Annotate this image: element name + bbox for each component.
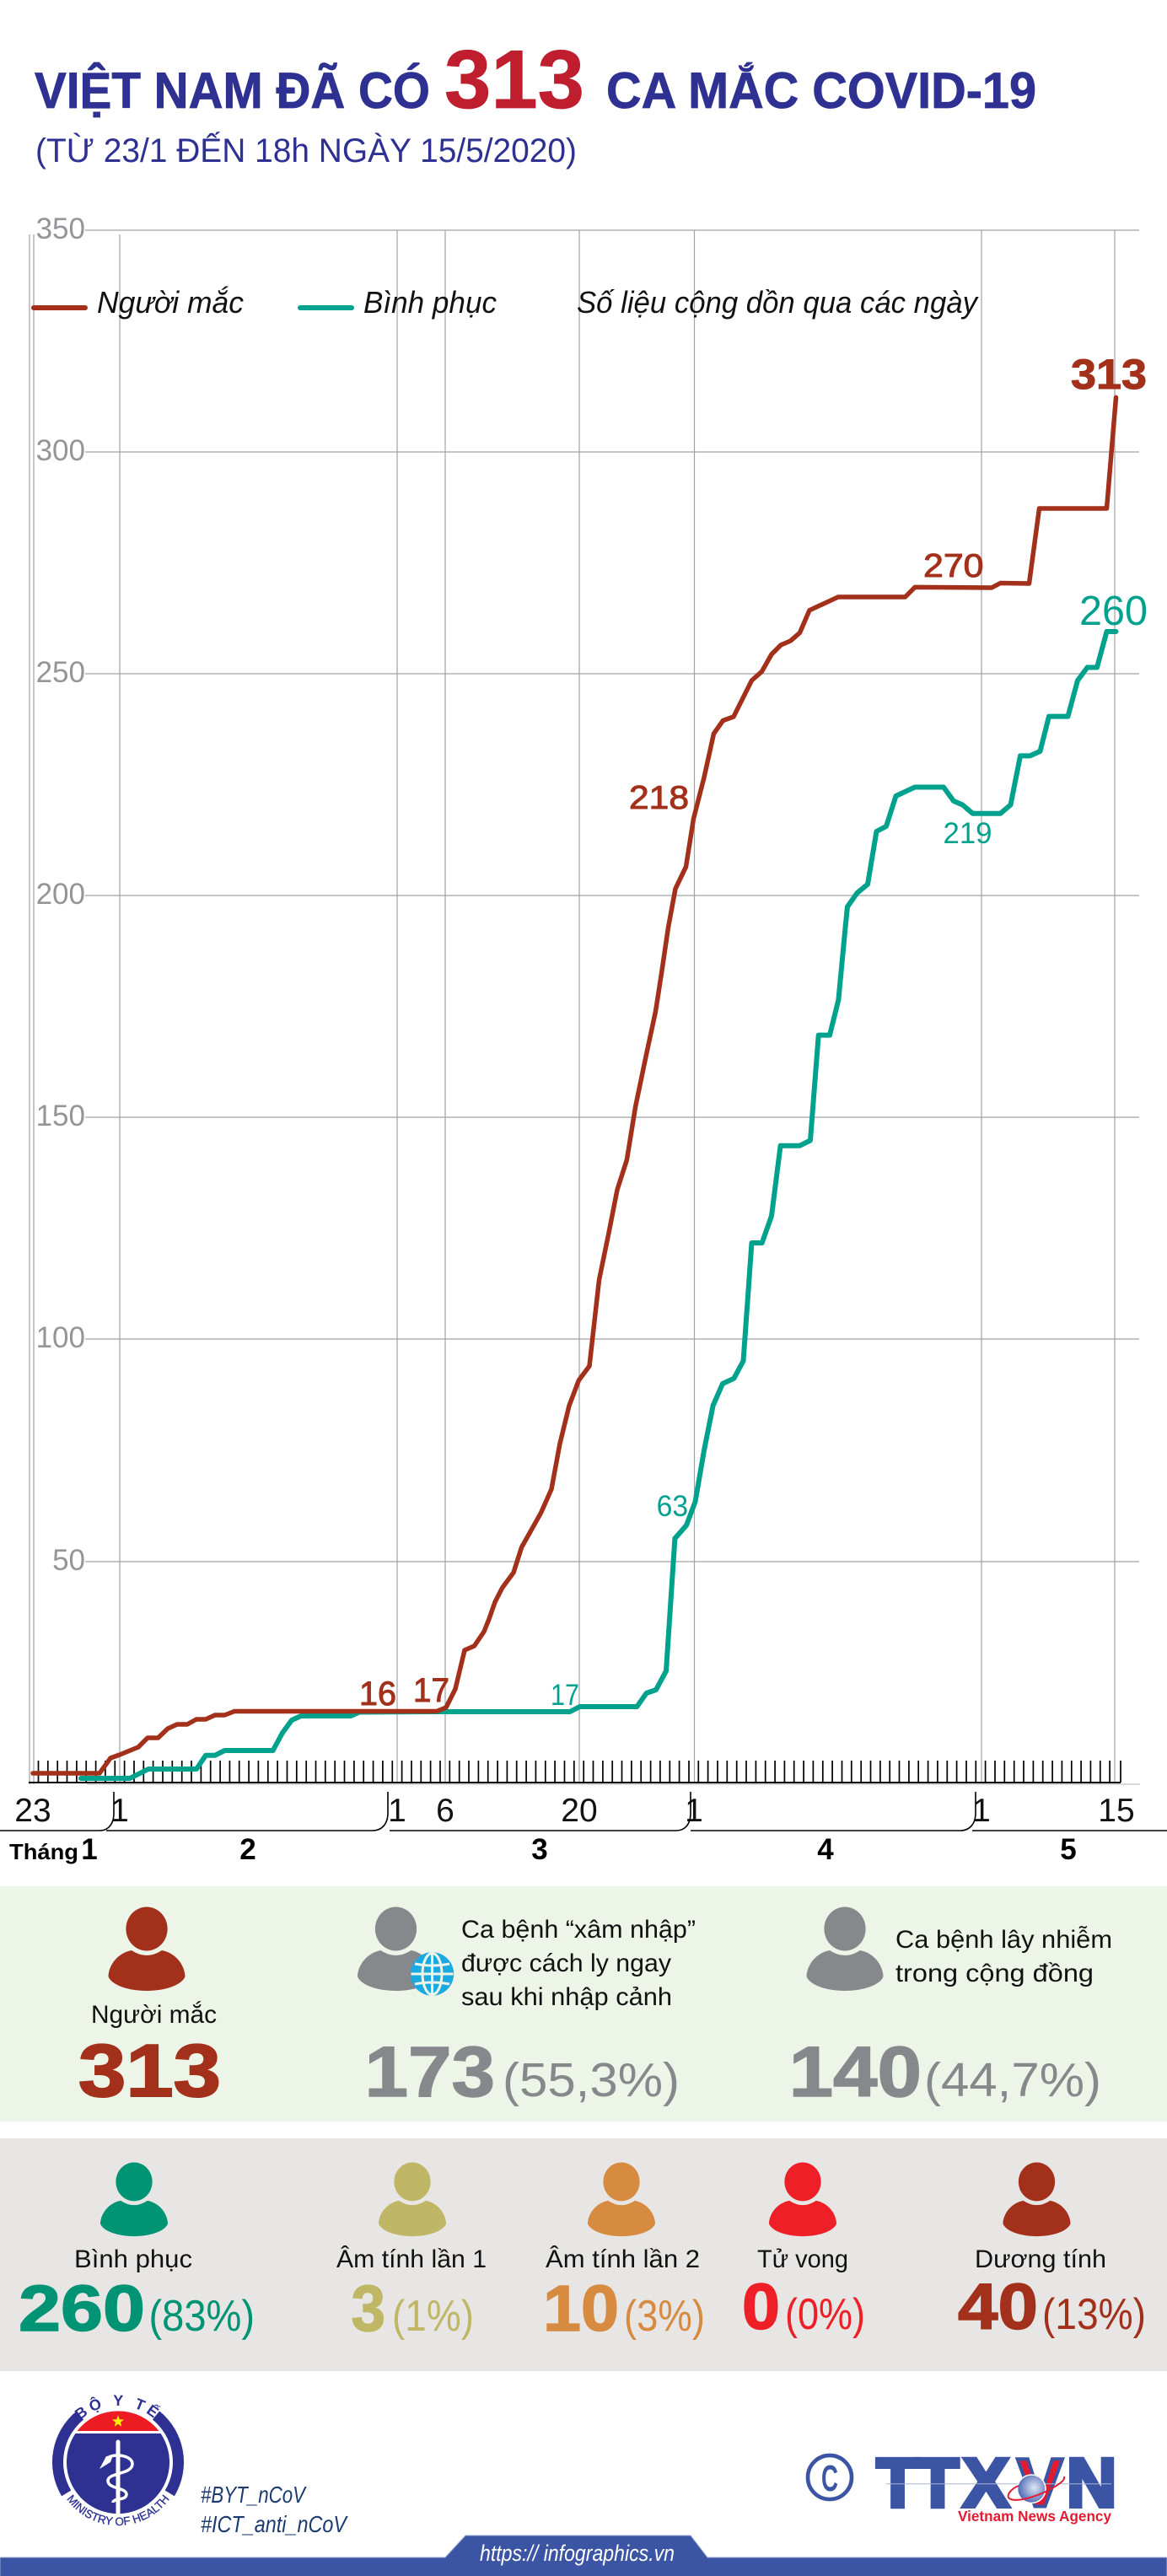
stat: recovered <box>19 2163 255 2345</box>
x axis date labels: 6 <box>436 1793 454 1829</box>
stat: positive: Dương tính <box>975 2245 1106 2273</box>
title: CA MẮC COVID-19 <box>606 62 1036 119</box>
stat: recovered: 260 <box>19 2272 145 2345</box>
stat: negative twice <box>543 2163 705 2345</box>
month brackets <box>0 1792 1167 1831</box>
x axis date labels: 1 <box>110 1793 129 1829</box>
month labels: 4 <box>817 1833 834 1866</box>
x axis ticks <box>29 1761 1121 1783</box>
logo: TTXVN: T <box>877 2445 919 2521</box>
icon: person brown <box>1003 2163 1071 2236</box>
stat: community cases: trong cộng đồng <box>895 1960 1094 1987</box>
data labels: infected: 313 <box>1071 351 1147 398</box>
icon: person khaki <box>379 2163 446 2236</box>
y axis labels: 250 <box>36 656 85 689</box>
panel: outcomes <box>0 2138 1167 2371</box>
logo: TTXVN: Vietnam News Agency <box>958 2508 1111 2525</box>
stat: deaths: (0%) <box>785 2290 865 2339</box>
stat: negative twice: (3%) <box>624 2292 705 2341</box>
icon: person orange <box>588 2163 655 2236</box>
stat: negative twice: 10 <box>543 2272 619 2345</box>
icon: person grey <box>806 1907 884 1991</box>
stat: imported cases: (55,3%) <box>503 2053 680 2107</box>
y axis labels: 350 <box>36 212 85 245</box>
logo: ministry of health: MINISTRY OF HEALTH <box>67 2494 169 2526</box>
stat: community cases <box>789 1907 1112 2111</box>
stat: infected total: Người mắc <box>91 2001 217 2029</box>
stat: negative once: Âm tính lần 1 <box>336 2245 487 2273</box>
icon: globe <box>411 1952 454 1996</box>
logo: TTXVN: T <box>917 2445 959 2521</box>
logo: TTXVN: N <box>1067 2445 1116 2521</box>
stat: deaths: Tử vong <box>757 2245 848 2273</box>
line chart <box>0 212 1167 1866</box>
stat: negative once: 3 <box>351 2272 385 2345</box>
data labels: recovered: 17 <box>551 1679 579 1712</box>
title: 313 <box>444 33 584 126</box>
stat: community cases: 140 <box>789 2032 922 2111</box>
stat: imported cases <box>358 1907 696 2111</box>
stat: community cases: Ca bệnh lây nhiễm <box>895 1926 1112 1954</box>
stat: recovered: (83%) <box>148 2292 255 2341</box>
month labels: 5 <box>1060 1833 1077 1866</box>
copyright mark <box>808 2455 852 2499</box>
y axis labels: 200 <box>36 878 85 911</box>
x axis date labels: 1 <box>972 1793 991 1829</box>
x axis date labels: 20 <box>561 1793 598 1829</box>
month labels: 3 <box>531 1833 548 1866</box>
y axis labels: 150 <box>36 1100 85 1132</box>
hashtags <box>201 2482 348 2537</box>
footer band: https:// infographics.vn <box>480 2541 675 2566</box>
x axis date labels <box>14 1793 1135 1829</box>
legend <box>34 285 979 320</box>
stat: positive <box>958 2163 1146 2343</box>
stat: positive: (13%) <box>1042 2290 1146 2339</box>
month labels: Tháng <box>9 1839 78 1864</box>
y axis labels <box>36 212 85 1577</box>
icon: person red <box>769 2163 836 2236</box>
stat: negative once: (1%) <box>392 2292 474 2341</box>
stat: recovered: Bình phục <box>74 2245 192 2273</box>
title: VIỆT NAM ĐÃ CÓ <box>35 62 430 119</box>
logo: TTXVN: X <box>963 2445 1009 2521</box>
logo: TTXVN: V <box>1017 2445 1063 2521</box>
month labels: 1 <box>81 1833 98 1866</box>
subtitle: (TỪ 23/1 ĐẾN 18h NGÀY 15/5/2020) <box>35 131 577 169</box>
icon: person grey <box>358 1907 434 1991</box>
legend: Số liệu cộng dồn qua các ngày <box>577 285 979 320</box>
y axis labels: 300 <box>36 434 85 467</box>
legend: Người mắc <box>97 285 244 320</box>
stat: positive: 40 <box>958 2271 1038 2343</box>
stat: imported cases: sau khi nhập cảnh <box>461 1983 672 2011</box>
stat: deaths <box>742 2163 865 2343</box>
logo: ministry of health: BỘ Y TẾ <box>74 2395 161 2418</box>
data labels: infected <box>359 351 1147 1713</box>
data labels: recovered <box>551 589 1148 1712</box>
x axis date labels: 1 <box>685 1793 703 1829</box>
stat: deaths: 0 <box>742 2271 780 2343</box>
stat: imported cases: được cách ly ngay <box>461 1949 671 1977</box>
panel: case origin <box>0 1886 1167 2122</box>
data labels: infected: 218 <box>629 780 689 816</box>
series: recovered line <box>81 632 1116 1778</box>
series: infected line <box>33 397 1116 1773</box>
data labels: infected: 16 <box>359 1675 396 1713</box>
copyright mark: C <box>821 2458 838 2499</box>
title <box>35 33 1036 126</box>
hashtags: #ICT_anti_nCoV <box>201 2511 348 2537</box>
stat: community cases: (44,7%) <box>924 2053 1101 2107</box>
icon: person red <box>108 1907 186 1991</box>
x axis date labels: 15 <box>1098 1793 1135 1829</box>
stat: negative twice: Âm tính lần 2 <box>546 2245 700 2273</box>
data labels: recovered: 260 <box>1079 589 1148 634</box>
stat: negative once <box>336 2163 487 2345</box>
x axis date labels: 1 <box>388 1793 406 1829</box>
icon: person green <box>100 2163 168 2236</box>
logo: ministry of health <box>52 2395 184 2526</box>
y axis labels: 50 <box>52 1544 85 1577</box>
logo: TTXVN <box>808 2445 1116 2525</box>
data labels: infected: 17 <box>413 1672 449 1709</box>
gridlines <box>30 230 1140 1784</box>
hashtags: #BYT_nCoV <box>201 2482 307 2508</box>
y axis labels: 100 <box>36 1321 85 1354</box>
month labels <box>9 1833 1077 1866</box>
stat: infected total: 313 <box>78 2029 221 2112</box>
legend: Bình phục <box>363 285 497 320</box>
stat: imported cases: Ca bệnh “xâm nhập” <box>461 1916 696 1944</box>
data labels: recovered: 219 <box>943 817 992 850</box>
footer band <box>0 2536 1167 2576</box>
x axis date labels: 23 <box>14 1793 51 1829</box>
stat: imported cases: 173 <box>364 2032 495 2111</box>
data labels: infected: 270 <box>923 548 983 584</box>
data labels: recovered: 63 <box>657 1490 688 1523</box>
month labels: 2 <box>239 1833 256 1866</box>
stat: infected total <box>78 1907 221 2112</box>
